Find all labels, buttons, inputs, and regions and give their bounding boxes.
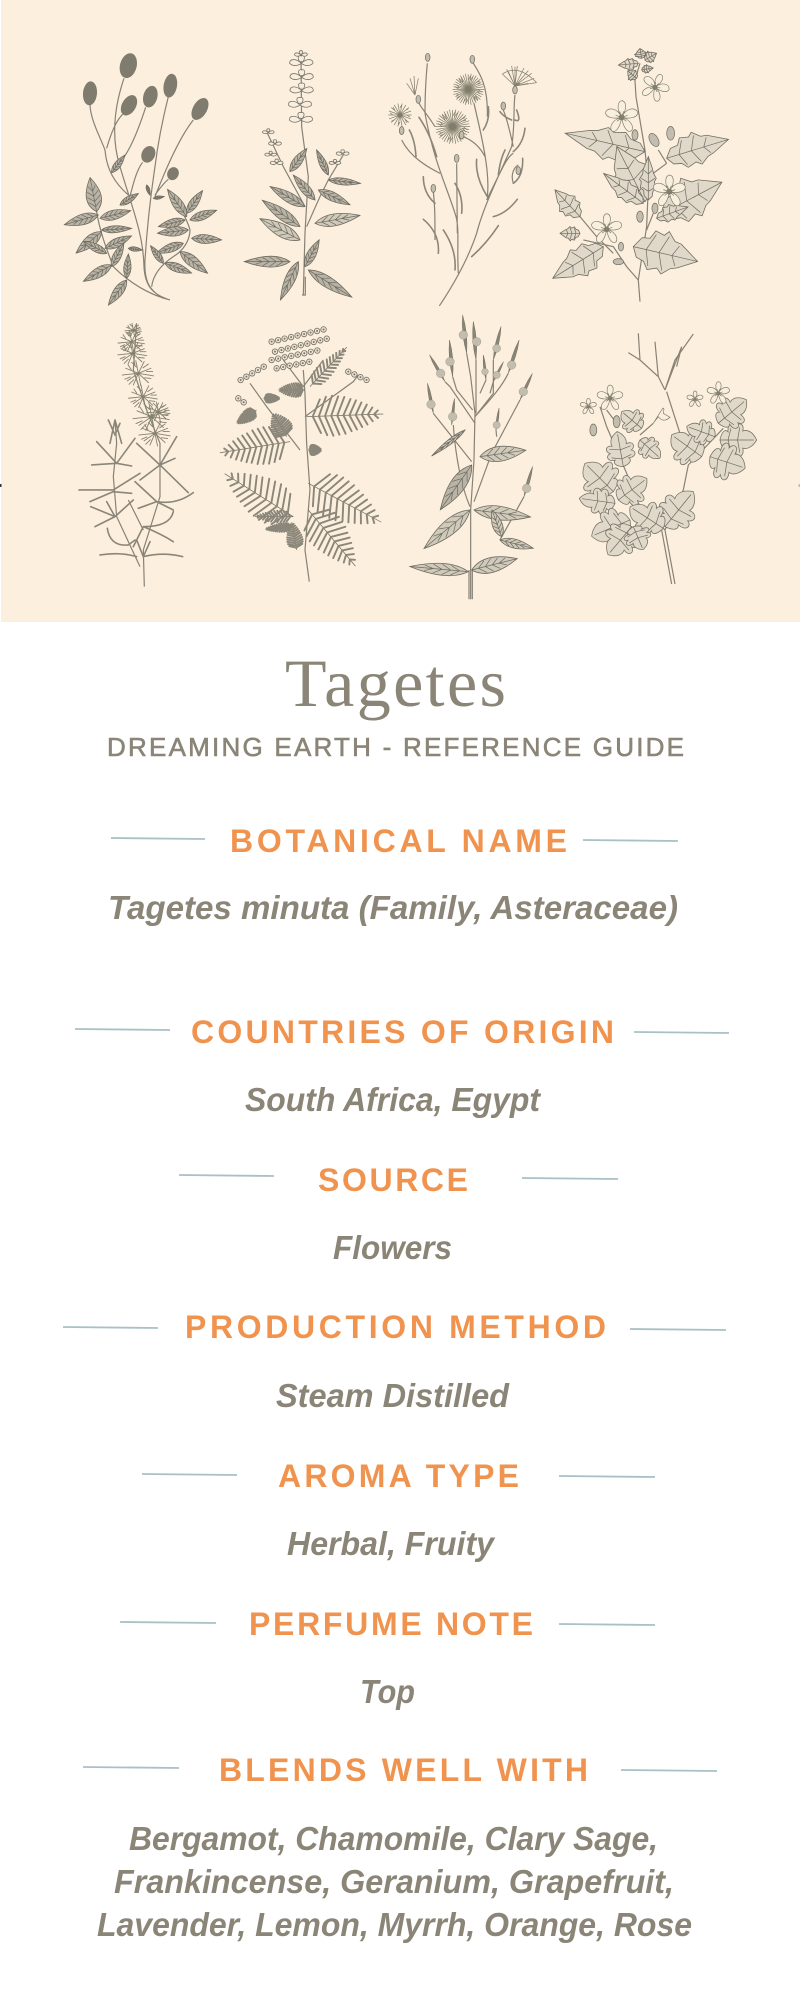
illustration: cornflower plant: [388, 53, 537, 306]
section: source: [179, 1162, 618, 1266]
value: countries of origin: South Africa, Egypt: [245, 1081, 542, 1118]
section: botanical name: [108, 823, 678, 926]
illustration: burnet plant: [63, 51, 222, 308]
illustration: sage plant: [244, 50, 361, 302]
plants artwork: [63, 47, 757, 599]
value: aroma type: Herbal, Fruity: [287, 1525, 496, 1562]
heading: countries of origin: COUNTRIES OF ORIGIN: [191, 1014, 614, 1050]
section: blends well with: [83, 1752, 717, 1943]
heading: blends well with: BLENDS WELL WITH: [219, 1752, 588, 1788]
value: blends well with: Frankincense, Geranium, Grapefruit,: [114, 1863, 674, 1900]
panel: botanical illustrations: [0, 0, 800, 622]
illustration: savory plant: [79, 323, 193, 587]
section: perfume note: [120, 1606, 655, 1710]
value: source: Flowers: [333, 1229, 452, 1266]
value: production method: Steam Distilled: [276, 1377, 510, 1414]
value: perfume note: Top: [360, 1673, 415, 1710]
section: aroma type: [142, 1458, 655, 1562]
section: countries of origin: [75, 1014, 729, 1118]
heading: aroma type: AROMA TYPE: [278, 1458, 519, 1494]
title: Tagetes: [285, 645, 506, 721]
illustration: celandine plant: [571, 333, 757, 584]
subtitle: DREAMING EARTH - REFERENCE GUIDE: [107, 732, 684, 762]
heading: perfume note: PERFUME NOTE: [249, 1606, 533, 1642]
heading: production method: PRODUCTION METHOD: [185, 1309, 606, 1345]
value: botanical name: Tagetes minuta (Family, Asteraceae): [108, 889, 678, 926]
illustration: mallow plant: [545, 47, 733, 302]
section: production method: [63, 1309, 726, 1414]
value: blends well with: Bergamot, Chamomile, Clary Sage,: [129, 1820, 658, 1857]
value: blends well with: Lavender, Lemon, Myrrh, Orange, Rose: [97, 1906, 692, 1943]
illustration: tansy plant: [213, 328, 391, 582]
value: blends well with: [97, 1820, 692, 1943]
heading: botanical name: BOTANICAL NAME: [230, 823, 567, 859]
heading: source: SOURCE: [318, 1162, 468, 1198]
illustration: vervain plant: [409, 315, 534, 599]
